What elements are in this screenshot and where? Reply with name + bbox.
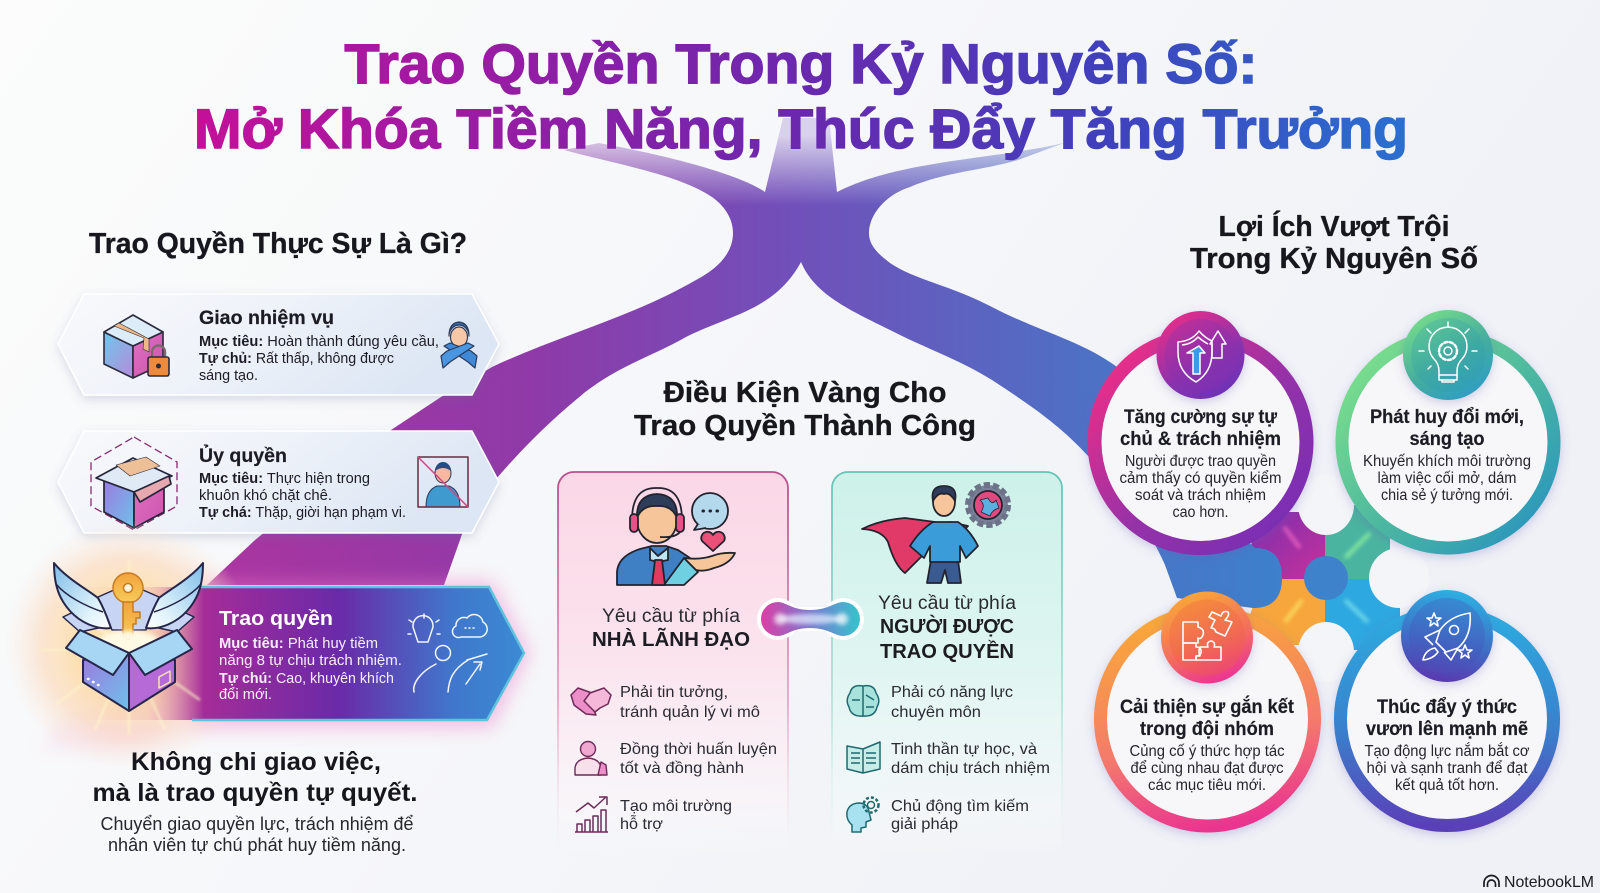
text: innovation: làm việc cối mở, dám: [1378, 470, 1516, 487]
text: autonomy: cao hơn.: [1172, 504, 1228, 521]
text: Giao nhiệm vụ: Tự chủ: Rất thấp, không được: [199, 350, 394, 367]
statement: Chuyển giao quyền lực, trách nhiệm để: [100, 814, 414, 834]
text: autonomy: chủ & trách nhiệm: [1120, 428, 1281, 450]
icon: leader with headset: [617, 488, 735, 585]
panel: leader requirements: [558, 472, 788, 857]
text: Yêu cầu từ phía nhà lãnh đạo: NHÀ LÃNH ĐẠO: [592, 628, 750, 651]
text: Trao quyền: [219, 608, 402, 703]
text: Yêu cầu từ phía người được trao quyền: NGƯỜI ĐƯỢC: [880, 614, 1014, 638]
text: team cohesion: [1120, 694, 1294, 794]
statement: [92, 748, 418, 855]
card: Giao nhiệm vụ: [58, 294, 499, 395]
text: autonomy: cảm thấy có quyền kiểm: [1120, 470, 1282, 487]
item: coaching: tốt và đồng hành: [620, 760, 744, 777]
text: competitive drive: hội và sạnh tranh để đạt: [1366, 760, 1528, 777]
text: competitive drive: Tạo động lực nắm bắt cơ: [1364, 743, 1530, 760]
text: competitive drive: [1364, 696, 1530, 794]
text: autonomy: soát và trách nhiệm: [1135, 487, 1266, 504]
title: [194, 32, 1408, 160]
text: competitive drive: vươn lên mạnh mẽ: [1366, 718, 1528, 740]
section heading: golden conditions: [634, 377, 976, 442]
text: competitive drive: Thúc đẩy ý thức: [1377, 696, 1517, 718]
icon: winged box with key: [54, 563, 203, 711]
hub: four colour quadrants: [1240, 475, 1429, 682]
icon: growth chart: [575, 797, 608, 832]
text: Yêu cầu từ phía người được trao quyền: Yêu cầu từ phía: [878, 593, 1016, 614]
title: Trao Quyền Trong Kỷ Nguyên Số:: [344, 32, 1258, 95]
text: innovation: [1363, 406, 1531, 504]
text: innovation: Khuyến khích môi trường: [1363, 453, 1531, 470]
benefit: autonomy and responsibility: [1094, 311, 1306, 548]
item: coaching: Đồng thời huấn luyện: [620, 741, 777, 758]
benefit: innovation: [1342, 310, 1554, 548]
section heading: golden conditions: Điều Kiện Vàng Cho: [664, 377, 946, 409]
text: Trao quyền: đổi mới.: [219, 686, 272, 703]
pink glow: [190, 581, 530, 728]
icon: shield with arrows: [1156, 311, 1244, 399]
section heading: benefits: Trong Kỷ Nguyên Số: [1190, 243, 1478, 275]
item: self-learning: dám chịu trách nhiệm: [891, 760, 1050, 777]
text: Trao quyền: Tự chú: Cao, khuyên khích: [219, 670, 394, 687]
icon: open book: [847, 742, 880, 773]
item: proactive: giải pháp: [891, 816, 958, 833]
benefit: team cohesion: [1100, 592, 1314, 826]
statement: mà là trao quyền tự quyết.: [92, 779, 418, 807]
icon: open box with dashed limits: [91, 437, 177, 530]
text: autonomy: Tăng cường sự tự: [1124, 406, 1278, 428]
icon: head with gear: [847, 798, 878, 832]
item: trust: tránh quản lý vi mô: [620, 704, 760, 721]
text: competitive drive: kết quả tốt hơn.: [1395, 777, 1499, 794]
icon: coach: [575, 742, 607, 775]
panel: empowered person requirements: [832, 472, 1062, 857]
item: proactive: [847, 798, 1029, 833]
text: autonomy: Người được trao quyền: [1125, 453, 1276, 470]
logo: NotebookLM: NotebookLM: [1504, 874, 1594, 891]
text: Ủy quyền: Mục tiêu: Thực hiện trong: [199, 470, 370, 487]
text: team cohesion: các mục tiêu mới.: [1148, 777, 1266, 794]
icon: person reaching with idea and cloud: [408, 614, 487, 692]
icon: locked box: [104, 315, 169, 378]
text: team cohesion: Cải thiện sự gắn kết: [1120, 694, 1294, 718]
text: innovation: chia sẻ ý tưởng mới.: [1381, 487, 1513, 504]
item: competence: chuyên môn: [891, 704, 981, 721]
statement: nhân viên tự chú phát huy tiềm năng.: [108, 835, 406, 855]
item: competence: [847, 684, 1013, 721]
branching ribbon from title to the three sections: [207, 118, 1282, 608]
icon: superhero with gear: [862, 485, 1008, 583]
connector between panels: [757, 598, 864, 640]
text: Ủy quyền: Ủy quyền: [199, 443, 287, 467]
card: Ủy quyền: [58, 431, 499, 533]
section heading: what is empowerment: Trao Quyền Thực Sự Là Gì?: [89, 228, 467, 260]
icon: person in a restricted frame: [418, 457, 468, 507]
icon: handshake: [571, 688, 611, 715]
text: team cohesion: Củng cố ý thức hợp tác: [1130, 743, 1285, 760]
text: Trao quyền: Trao quyền: [219, 608, 333, 630]
text: Trao quyền: Mục tiêu: Phát huy tiềm: [219, 635, 378, 652]
text: Ủy quyền: Tự chá: Thặp, giời hạn phạm vi.: [199, 504, 406, 521]
text: autonomy: [1120, 406, 1282, 521]
text: Yêu cầu từ phía người được trao quyền: TRAO QUYỀN: [880, 640, 1014, 663]
text: Yêu cầu từ phía nhà lãnh đạo: [592, 606, 750, 651]
text: Trao quyền: năng 8 tự chịu trách nhiệm.: [219, 652, 402, 669]
icon: gear lightbulb: [1403, 310, 1493, 400]
text: Ủy quyền: [199, 443, 406, 521]
hub centre dot: [1304, 556, 1348, 600]
item: self-learning: [847, 741, 1050, 777]
light rays: [40, 560, 200, 735]
section heading: benefits: Lợi Ích Vượt Trội: [1218, 209, 1450, 243]
section heading: benefits: [1190, 209, 1478, 275]
item: proactive: Chủ động tìm kiếm: [891, 798, 1029, 815]
text: Yêu cầu từ phía người được trao quyền: [878, 593, 1016, 663]
text: Giao nhiệm vụ: Mục tiêu: Hoàn thành đúng yêu cầu,: [199, 333, 439, 350]
item: trust: Phải tin tưởng,: [620, 684, 728, 701]
item: environment: Tạo môi trường: [620, 798, 732, 815]
orange radiant glow: [4, 520, 254, 770]
item: self-learning: Tinh thần tự học, và: [891, 741, 1037, 758]
item: competence: Phải có năng lực: [891, 684, 1013, 701]
section heading: golden conditions: Trao Quyền Thành Công: [634, 410, 976, 442]
statement: Không chi giao việc,: [131, 748, 381, 776]
text: innovation: Phát huy đổi mới,: [1370, 406, 1524, 428]
icon: person with crossed arms: [441, 322, 477, 368]
card: Trao quyền: [4, 520, 530, 770]
text: innovation: sáng tạo: [1410, 428, 1485, 450]
text: team cohesion: trong đội nhóm: [1140, 718, 1274, 740]
text: Yêu cầu từ phía nhà lãnh đạo: Yêu cầu từ phía: [602, 606, 740, 627]
item: trust: [571, 684, 760, 721]
title: Mở Khóa Tiềm Năng, Thúc Đẩy Tăng Trưởng: [194, 97, 1408, 160]
item: environment: hỗ trợ: [620, 814, 664, 833]
text: Ủy quyền: khuôn khó chặt chê.: [199, 487, 332, 504]
text: team cohesion: để cùng nhau đạt được: [1130, 760, 1284, 777]
item: environment: [575, 797, 732, 833]
icon: puzzle pieces: [1161, 592, 1253, 684]
item: coaching: [575, 741, 777, 777]
text: Giao nhiệm vụ: [199, 307, 439, 384]
icon: brain: [847, 686, 879, 716]
icon: rocket and stars: [1401, 590, 1493, 682]
benefit: competitive drive: [1340, 590, 1554, 826]
text: Giao nhiệm vụ: Giao nhiệm vụ: [199, 307, 334, 329]
text: Giao nhiệm vụ: sáng tạo.: [199, 367, 258, 384]
